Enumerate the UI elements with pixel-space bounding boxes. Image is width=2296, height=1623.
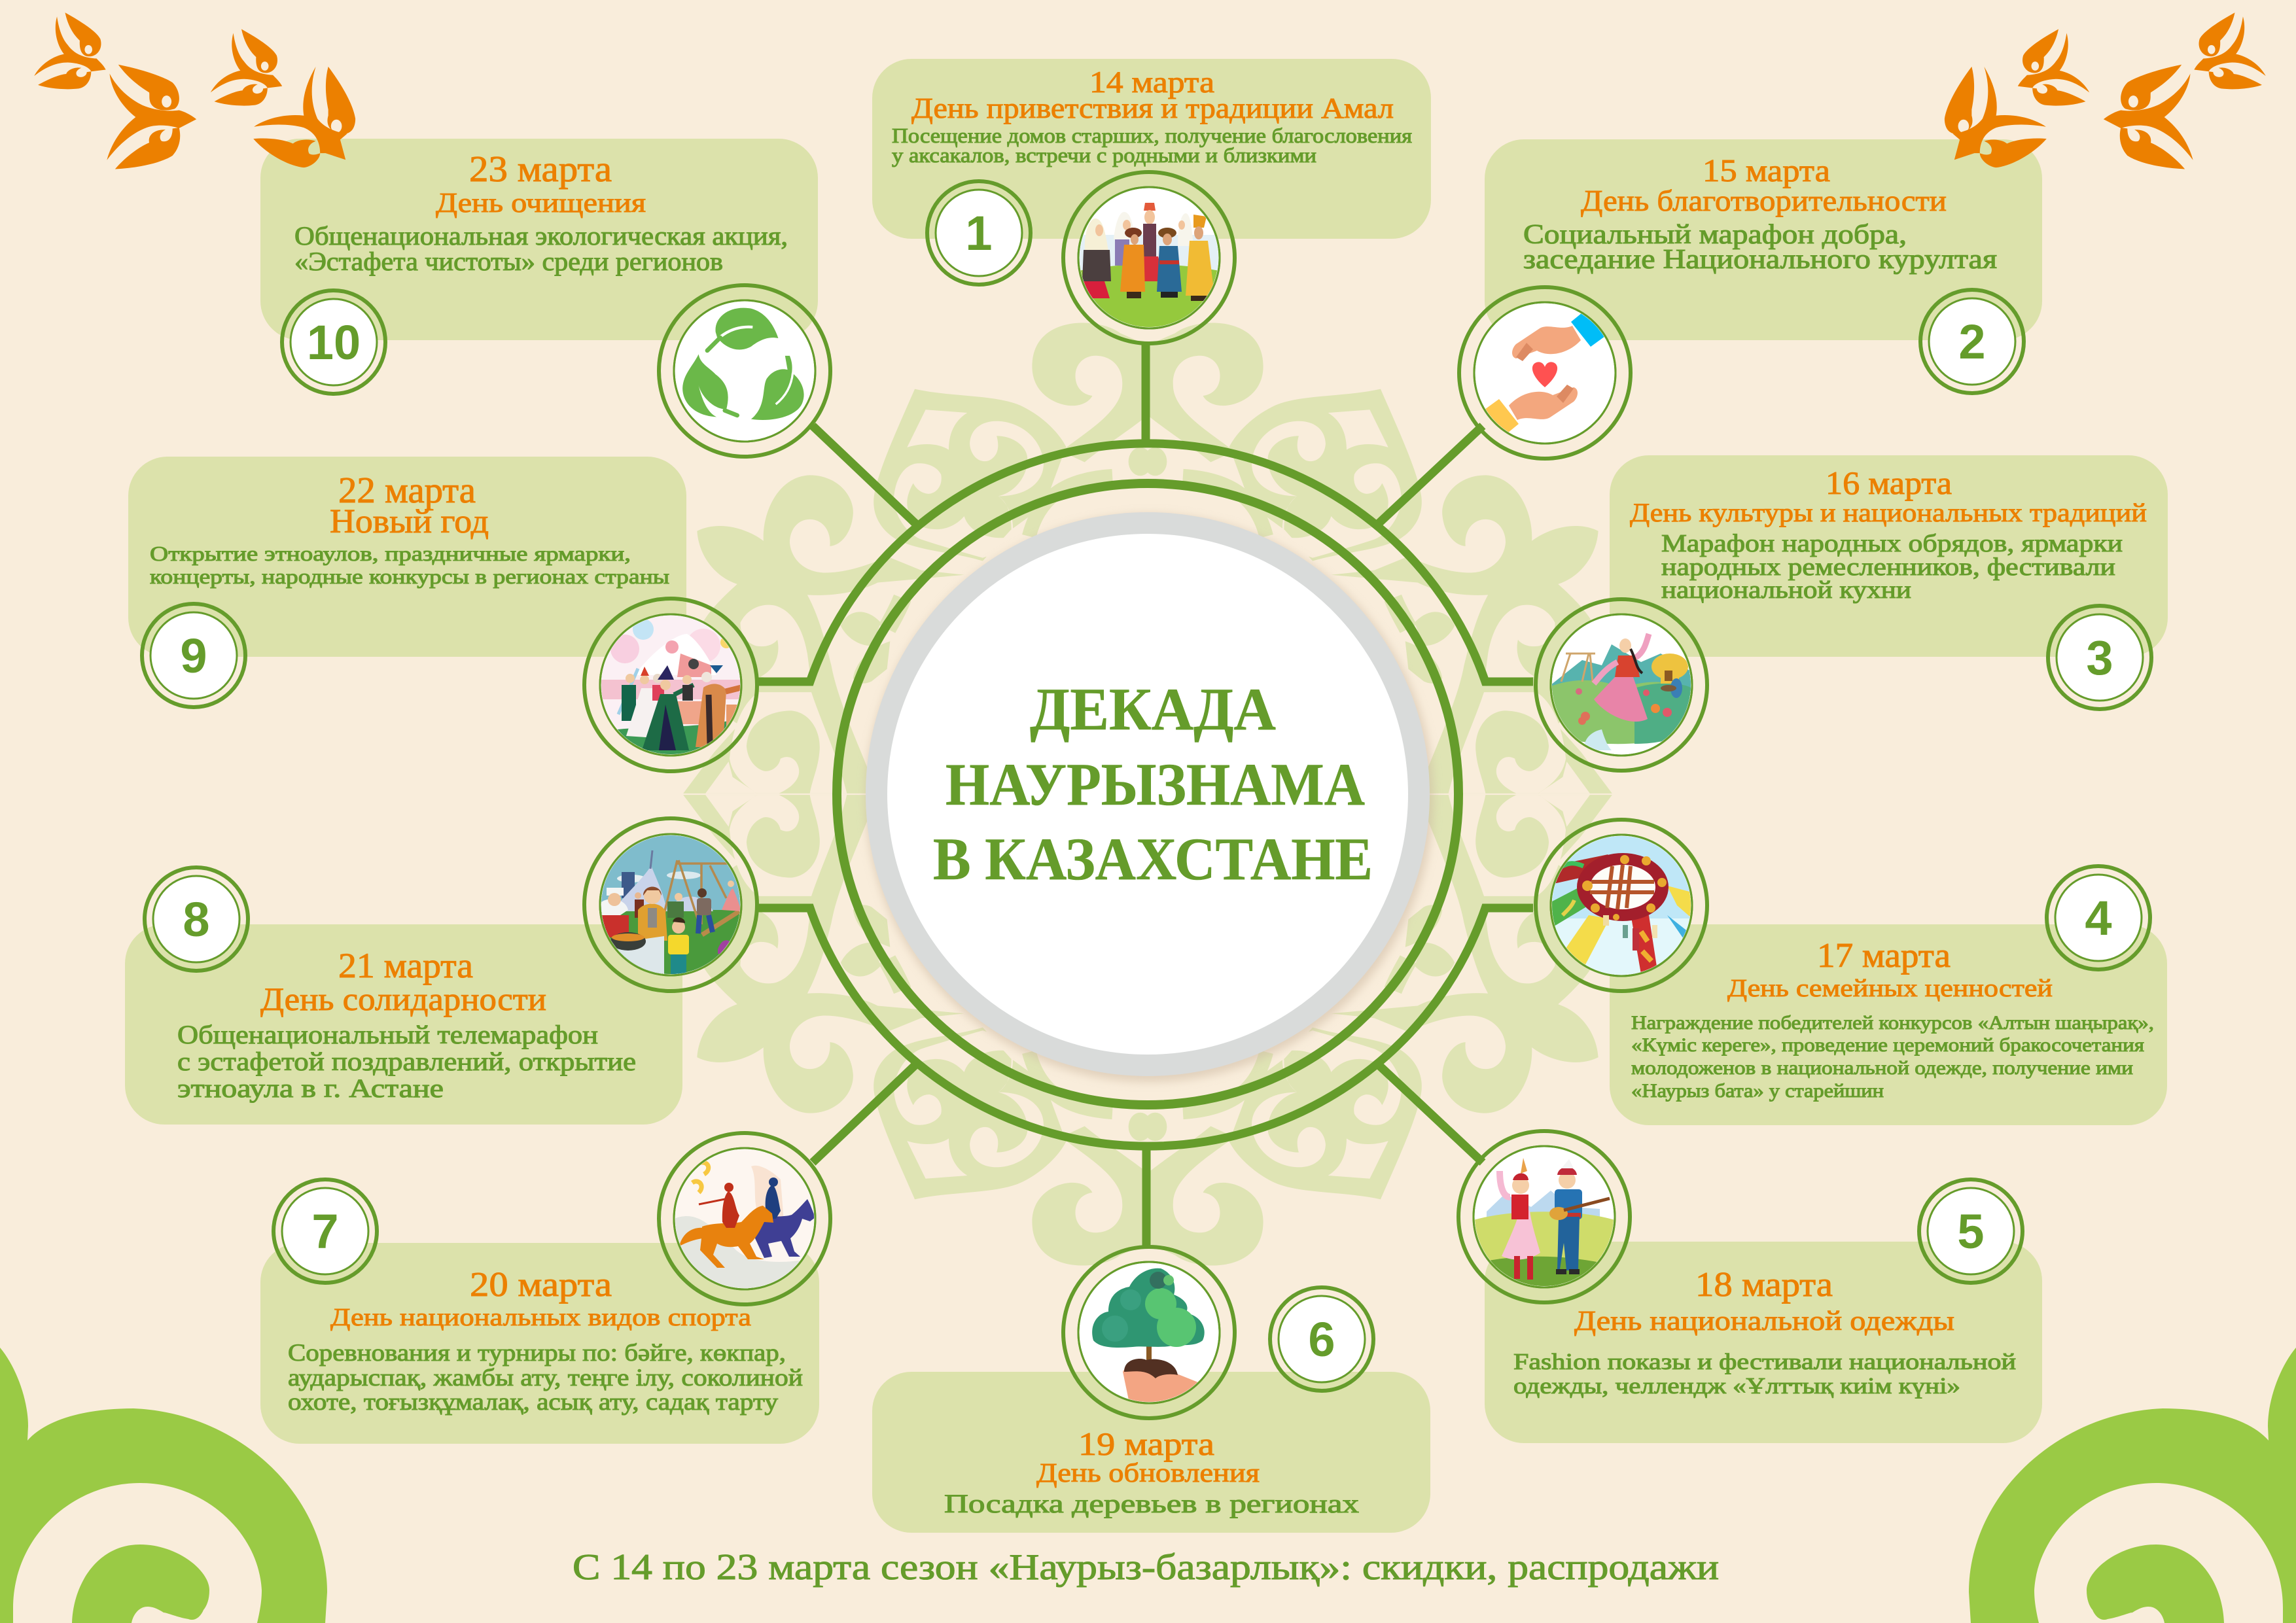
panel: 18 march xyxy=(1485,1242,2042,1443)
description: Награждение победителей конкурсов «Алтын шаңырақ», xyxy=(1631,1012,2154,1034)
icon: giving hands and heart (day 2) xyxy=(1459,287,1631,459)
date: 20 марта xyxy=(470,1266,612,1304)
panel: 23 march xyxy=(260,139,818,340)
panel: 20 march xyxy=(260,1243,819,1444)
icon: yurt shanyrak (day 4) xyxy=(1536,820,1707,991)
badge: 8: 8 xyxy=(183,892,210,947)
description: аударыспақ, жамбы ату, теңге ілу, соколиной xyxy=(288,1365,803,1391)
icon: people greeting (day 1) xyxy=(1063,172,1235,343)
description: народных ремесленников, фестивали xyxy=(1661,553,2115,581)
ornament: bottom right corner swirl xyxy=(1969,1348,2296,1623)
description: «Наурыз бата» у старейшин xyxy=(1631,1080,1884,1102)
icon: tree in a hand (day 6) xyxy=(1063,1247,1235,1418)
description: охоте, тоғызқұмалақ, асық ату, садақ тарту xyxy=(288,1389,779,1416)
description: Соревнования и турниры по: бәйге, көкпар, xyxy=(288,1340,786,1367)
description xyxy=(1513,1349,2016,1399)
connectors and outer ring arcs xyxy=(758,343,1533,1246)
date: 16 марта xyxy=(1826,464,1952,501)
panel: 19 march xyxy=(872,1372,1430,1533)
description: Марафон народных обрядов, ярмарки xyxy=(1661,530,2123,557)
day name: День солидарности xyxy=(260,981,546,1017)
description: у аксакалов, встречи с родными и близкими xyxy=(892,143,1316,167)
panel: 15 march xyxy=(1485,139,2042,340)
badge: 9: 9 xyxy=(180,629,207,683)
description: концерты, народные конкурсы в регионах страны xyxy=(150,565,669,588)
description: Fashion показы и фестивали национальной xyxy=(1513,1349,2016,1374)
description xyxy=(1523,220,1997,275)
date: 21 марта xyxy=(338,946,473,985)
description: Общенациональный телемарафон xyxy=(177,1020,598,1049)
badge: 3: 3 xyxy=(2086,631,2113,685)
panel: 22 march xyxy=(128,457,686,657)
badge: 10 xyxy=(282,290,385,394)
description: Открытие этноаулов, праздничные ярмарки, xyxy=(150,542,631,565)
description: заседание Национального курултая xyxy=(1523,245,1997,275)
panel: 21 march xyxy=(125,924,682,1125)
description xyxy=(288,1340,803,1416)
icon: recycling leaves (day 10) xyxy=(659,285,830,457)
badge: 8 xyxy=(145,867,248,971)
description: «Күміс кереге», проведение церемоний бракосочетания xyxy=(1631,1034,2144,1056)
badge: 6: 6 xyxy=(1308,1312,1335,1367)
ornament: central background pattern xyxy=(683,323,1612,1266)
central circle with title xyxy=(837,483,1458,1105)
description xyxy=(150,542,669,588)
ornament: bottom left corner swirl xyxy=(0,1348,327,1623)
description: Общенациональная экологическая акция, xyxy=(294,221,788,251)
description: Посадка деревьев в регионах xyxy=(944,1489,1359,1518)
description: Посещение домов старших, получение благословения xyxy=(892,124,1412,147)
description: «Эстафета чистоты» среди регионов xyxy=(294,247,723,276)
description xyxy=(294,221,788,276)
description xyxy=(892,124,1412,167)
day name: День приветствия и традиции Амал xyxy=(911,92,1394,124)
day name: День очищения xyxy=(436,188,646,218)
badge: 4: 4 xyxy=(2085,891,2112,945)
badge: 1: 1 xyxy=(965,206,993,260)
ornament: orange birds top right xyxy=(1945,12,2266,169)
badge: 7 xyxy=(274,1179,377,1283)
panel: 17 march xyxy=(1610,924,2167,1125)
description xyxy=(177,1020,636,1103)
day name: День обновления xyxy=(1036,1457,1260,1488)
title xyxy=(933,676,1373,892)
date: 17 марта xyxy=(1817,937,1951,975)
description xyxy=(1661,530,2123,604)
panel: 14 march xyxy=(872,59,1431,239)
date: 14 марта xyxy=(1089,65,1214,99)
badge: 3 xyxy=(2048,606,2151,709)
description: одежды, челлендж «Ұлттық киім күні» xyxy=(1513,1373,1960,1399)
date: 23 марта xyxy=(469,149,612,190)
description xyxy=(1631,1012,2154,1102)
description: национальной кухни xyxy=(1661,576,1911,604)
icon: horse riders (day 7) xyxy=(659,1133,830,1304)
date: 22 марта xyxy=(338,470,476,511)
description: молодоженов в национальной одежде, получение ими xyxy=(1631,1057,2133,1079)
day name: День национальной одежды xyxy=(1574,1306,1954,1336)
icon: dancer in meadow (day 3) xyxy=(1536,599,1707,771)
badge: 5: 5 xyxy=(1957,1204,1985,1259)
badge: 10: 10 xyxy=(307,315,361,370)
badge: 4 xyxy=(2047,866,2150,969)
ornament: orange birds top left xyxy=(34,12,355,169)
day name: День культуры и национальных традиций xyxy=(1630,498,2147,527)
title: НАУРЫЗНАМА xyxy=(945,751,1365,818)
panel: 16 march xyxy=(1610,455,2168,657)
badge: 2 xyxy=(1920,290,2024,393)
icon: Nauryz new year celebration (day 9) xyxy=(584,599,757,771)
date: 15 марта xyxy=(1703,152,1830,188)
badge: 1 xyxy=(927,181,1031,285)
icon: festival market scene (day 8) xyxy=(584,818,757,991)
badge: 7: 7 xyxy=(311,1204,339,1259)
description: Социальный марафон добра, xyxy=(1523,220,1907,250)
day name: День благотворительности xyxy=(1581,184,1947,217)
day name: День семейных ценностей xyxy=(1727,975,2053,1002)
badge: 9 xyxy=(142,604,245,707)
badge: 6 xyxy=(1270,1287,1373,1391)
title: ДЕКАДА xyxy=(1030,676,1276,742)
description: с эстафетой поздравлений, открытие xyxy=(177,1047,636,1076)
footer note: С 14 по 23 марта сезон «Наурыз-базарлық»: скидки, распродажи xyxy=(573,1547,1719,1588)
date: 19 марта xyxy=(1078,1425,1214,1462)
badge: 5 xyxy=(1919,1179,2022,1283)
icon: children in national costume (day 5) xyxy=(1458,1131,1630,1302)
day name: Новый год xyxy=(330,503,489,540)
description: этноаула в г. Астане xyxy=(177,1073,444,1103)
day name: День национальных видов спорта xyxy=(330,1304,751,1331)
title: В КАЗАХСТАНЕ xyxy=(933,826,1373,892)
date: 18 марта xyxy=(1695,1266,1833,1304)
badge: 2: 2 xyxy=(1958,315,1986,369)
